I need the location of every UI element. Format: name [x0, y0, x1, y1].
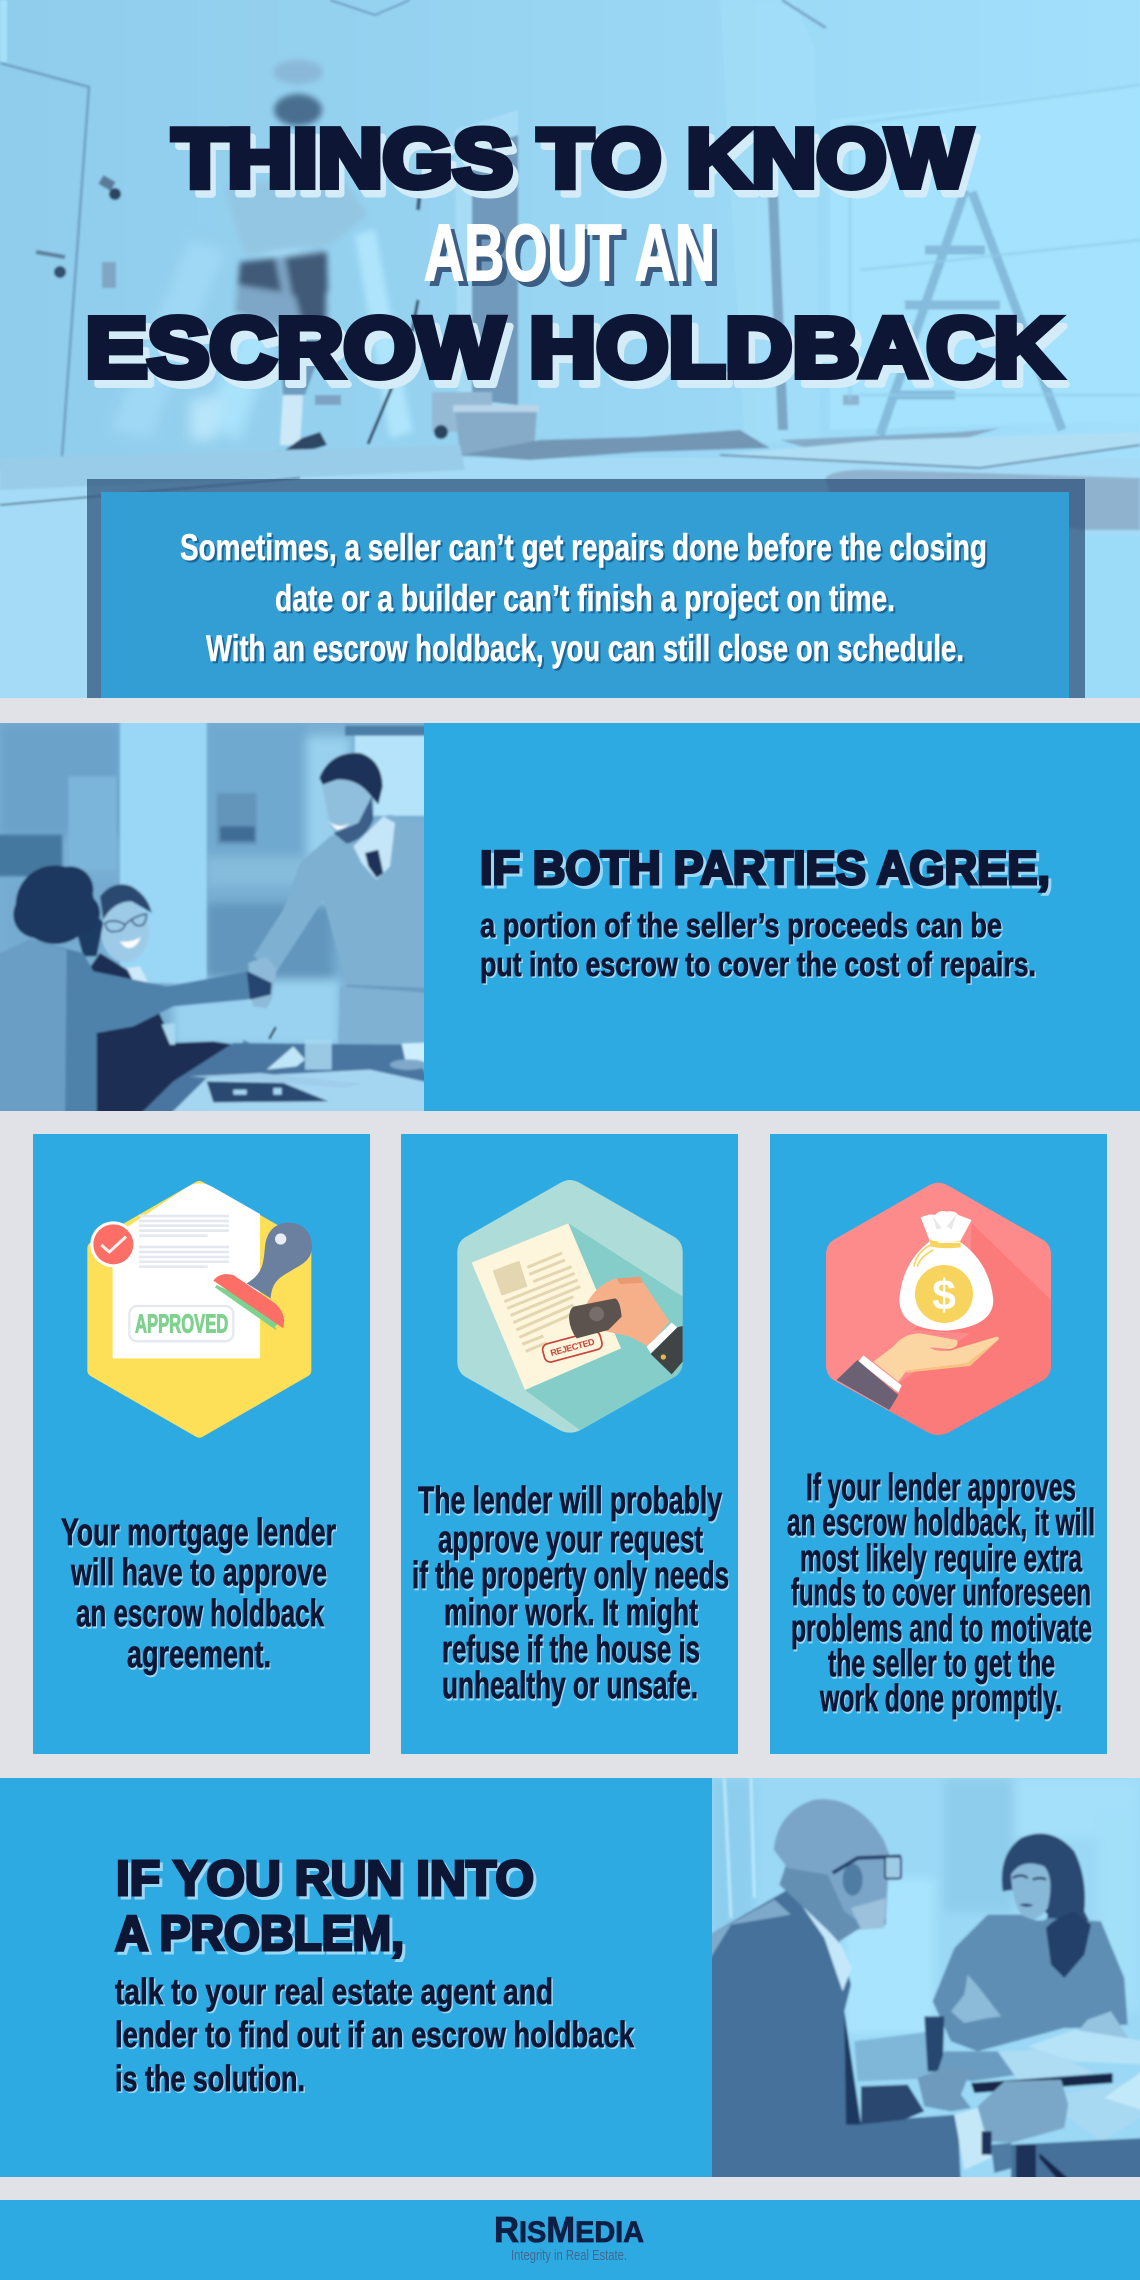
card text: Your mortgage lender [62, 1514, 337, 1556]
panel: card minor work [401, 1134, 738, 1754]
text: talk to your agent and lender: talk to your real estate agent and [115, 1971, 553, 2012]
tagline: Integrity in Real Estate. [511, 2247, 627, 2264]
card text: Your mortgage lender [61, 1512, 336, 1554]
panel: footer [0, 2200, 1140, 2280]
card text: an escrow holdback [76, 1593, 325, 1635]
heading: if you run into a problem [115, 1852, 537, 1964]
icon: approved document and stamp [90, 1183, 312, 1431]
heading: if both parties agree: IF BOTH PARTIES AGREE, [483, 844, 1053, 897]
card text: if the property only needs [412, 1555, 729, 1597]
heading: if you run into a problem: A PROBLEM, [118, 1910, 407, 1964]
panel: both parties agree [424, 723, 1140, 1111]
card text: The lender will probably [419, 1482, 723, 1524]
card text [61, 1512, 337, 1678]
text: seller proceeds into escrow: a portion of the seller’s proceeds can be [480, 907, 1002, 945]
text: seller proceeds into escrow: a portion of the seller’s proceeds can be [482, 908, 1004, 946]
text: talk to your agent and lender: is the solution. [116, 2060, 306, 2100]
photo: handshake at meeting [0, 716, 431, 1118]
icon: money bag over hand [826, 1183, 1051, 1438]
text: talk to your agent and lender [115, 1971, 636, 2100]
heading: if you run into a problem: A PROBLEM, [115, 1907, 404, 1961]
title: things to know about an escrow holdback [86, 112, 1067, 402]
intro text: date or a builder can’t finish a project on time. [275, 578, 895, 619]
card text: will have to approve [70, 1552, 327, 1594]
text: talk to your agent and lender: lender to find out if an escrow holdback [115, 2014, 635, 2055]
card text: refuse if the house is [442, 1629, 700, 1671]
panel: card extra funds [770, 1134, 1107, 1754]
heading: if you run into a problem: IF YOU RUN INTO [116, 1852, 534, 1906]
card text: agreement. [127, 1634, 271, 1676]
hero photo: renovation room with worker and ladders [0, 0, 1140, 703]
card text: an escrow holdback [77, 1595, 326, 1637]
card text: agreement. [128, 1636, 272, 1678]
intro text: date or a builder can’t finish a project on time. [277, 580, 897, 621]
card text: The lender will probably [418, 1480, 722, 1522]
logo: RisMedia: RISMEDIA [494, 2209, 644, 2250]
title: things to know about an escrow holdback: ESCROW HOLDBACK [86, 300, 1060, 394]
card text: refuse if the house is [443, 1631, 701, 1673]
panel: intro box [87, 479, 1085, 698]
card text: minor work. It might [444, 1592, 698, 1634]
card text: unhealthy or unsafe. [442, 1665, 698, 1707]
card text: approve your request [439, 1521, 704, 1563]
heading: if you run into a problem: IF YOU RUN INTO [119, 1855, 537, 1909]
card text: minor work. It might [445, 1594, 699, 1636]
text: seller proceeds into escrow [480, 907, 1038, 986]
panel: card lender approval [33, 1134, 370, 1754]
text: talk to your agent and lender: lender to find out if an escrow holdback [116, 2016, 636, 2056]
title: things to know about an escrow holdback: THINGS TO KNOW [172, 112, 972, 204]
icon: approved document and stamp: APPROVED [135, 1309, 228, 1339]
title: things to know about an escrow holdback: THINGS TO KNOW [178, 119, 978, 212]
intro text [180, 527, 989, 671]
text: talk to your agent and lender: is the solution. [115, 2058, 305, 2099]
panel: if you run into a problem [0, 1778, 711, 2177]
text: talk to your agent and lender: talk to your real estate agent and [116, 1972, 554, 2014]
icon: rejected document and hand stamp: REJECTED [549, 1336, 596, 1358]
card text: will have to approve [71, 1554, 328, 1596]
title: things to know about an escrow holdback: ESCROW HOLDBACK [92, 308, 1067, 402]
title: things to know about an escrow holdback: ABOUT AN [424, 208, 715, 297]
card text: unhealthy or unsafe. [443, 1667, 699, 1709]
card text: if the property only needs [413, 1557, 730, 1599]
card text [412, 1480, 730, 1709]
icon: money bag over hand: $ [932, 1271, 956, 1319]
heading: if both parties agree: IF BOTH PARTIES AGREE, [480, 841, 1050, 894]
card text [787, 1467, 1096, 1722]
title: things to know about an escrow holdback: ABOUT AN [429, 213, 720, 302]
icon: rejected document and hand stamp [457, 1180, 683, 1433]
card text: approve your request [438, 1519, 703, 1561]
photo: man and woman reviewing papers [704, 1771, 1140, 2184]
